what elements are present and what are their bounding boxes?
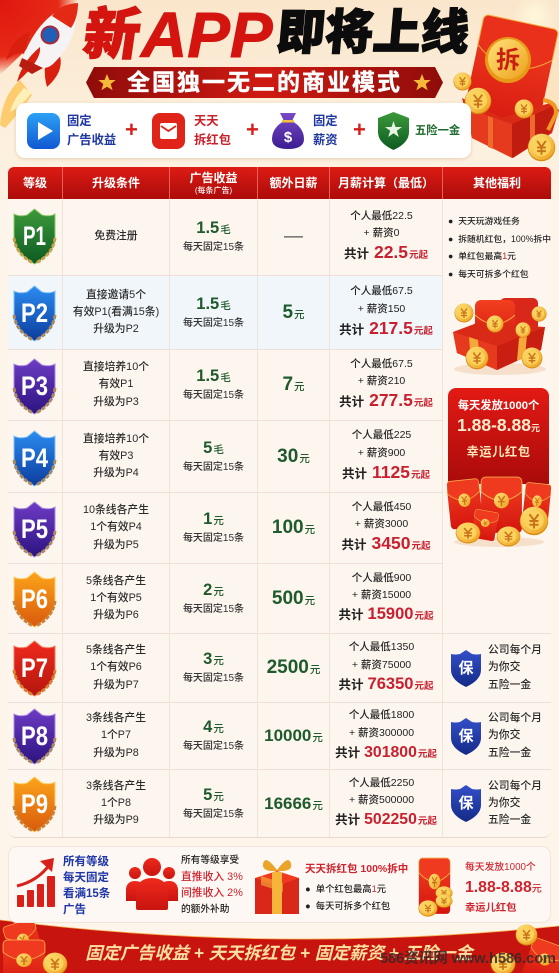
condition: 升级为P6 bbox=[93, 609, 139, 621]
title bbox=[80, 0, 471, 71]
text: fixed ad income bbox=[67, 114, 116, 146]
ad income: 5元 bbox=[203, 786, 224, 804]
footer feature panel bbox=[8, 846, 551, 923]
icon: play bbox=[27, 113, 60, 149]
badge P5 bbox=[12, 502, 56, 558]
text: referral income: 所有等级享受 bbox=[181, 855, 239, 866]
monthly calc: 个人最低1800 bbox=[349, 709, 414, 721]
ad income: 1.5毛 bbox=[196, 367, 231, 385]
condition: 直接邀请5个 bbox=[86, 289, 146, 301]
badge P7: P7 bbox=[21, 653, 48, 683]
daily salary: 7元 bbox=[282, 374, 305, 395]
condition: 有效P1 bbox=[99, 378, 133, 390]
text: fixed ad income: 固定 bbox=[67, 114, 92, 128]
daily salary: 5元 bbox=[282, 302, 305, 322]
text: fixed ad income: 广告收益 bbox=[67, 132, 116, 146]
text: referral income: 直推收入 3% bbox=[181, 871, 243, 883]
monthly calc: 共计 277.5元起 bbox=[339, 390, 433, 410]
condition: 升级为P7 bbox=[93, 679, 139, 691]
condition: 免费注册 bbox=[94, 230, 138, 242]
badge P4: P4 bbox=[21, 443, 48, 473]
ad income: 4元 bbox=[203, 718, 224, 736]
ad income: 每天固定15条 bbox=[183, 604, 244, 614]
lucky red packet banner: 幸运儿红包 bbox=[466, 445, 530, 459]
daily salary bbox=[257, 421, 329, 492]
condition: 10条线各产生 bbox=[83, 504, 149, 516]
daily salary bbox=[257, 564, 329, 633]
daily salary: 10000元 bbox=[264, 726, 323, 745]
daily salary: 16666元 bbox=[264, 794, 323, 812]
monthly calc bbox=[329, 276, 442, 349]
monthly calc: + 薪资0 bbox=[364, 227, 399, 239]
text: daily red packet: 天天 bbox=[194, 114, 219, 128]
icon: people bbox=[126, 858, 178, 910]
condition: 1个P7 bbox=[101, 729, 131, 741]
header cells: 月薪计算（最低） bbox=[338, 176, 434, 190]
badge P4 bbox=[12, 430, 56, 486]
monthly calc: 个人最低1350 bbox=[349, 641, 414, 653]
ad income bbox=[169, 350, 257, 420]
ad income bbox=[169, 199, 257, 275]
benefits list: ● 拆随机红包，100%拆中 bbox=[448, 234, 551, 244]
badge P7 bbox=[12, 640, 56, 696]
ad income: 每天固定15条 bbox=[183, 673, 244, 684]
monthly calc: 共计15900元起 bbox=[339, 605, 433, 623]
monthly calc: + 薪资300000 bbox=[349, 726, 414, 738]
text: referral income: 的额外补助 bbox=[181, 904, 229, 915]
ad income: 3元 bbox=[203, 650, 224, 668]
condition: 1个有效P4 bbox=[90, 521, 142, 533]
ad income: 5毛 bbox=[203, 438, 224, 456]
text: all levels ads bbox=[63, 855, 110, 916]
ad income: 每天固定15条 bbox=[183, 390, 244, 401]
condition: 升级为P5 bbox=[93, 539, 139, 551]
insurance benefit bbox=[442, 703, 551, 769]
insurance benefit bbox=[442, 770, 551, 837]
icon: money bag bbox=[272, 113, 304, 149]
insurance benefit: 为你交 bbox=[488, 729, 520, 741]
monthly calc: 个人最低22.5 bbox=[350, 210, 413, 222]
footer slogan: 固定广告收益 + 天天拆红包 + 固定薪资 + 五险一金 bbox=[85, 943, 473, 963]
condition bbox=[62, 350, 169, 420]
daily salary bbox=[257, 199, 329, 275]
monthly calc: + 薪资150 bbox=[358, 302, 405, 314]
text: referral income: 间推收入 2% bbox=[181, 887, 243, 899]
monthly calc bbox=[329, 634, 442, 702]
row P9 bbox=[8, 770, 551, 838]
insurance benefit bbox=[442, 634, 551, 702]
text: daily packet: ● 每天可拆多个红包 bbox=[305, 901, 390, 911]
monthly calc bbox=[329, 564, 442, 633]
text: all levels ads: 广告 bbox=[63, 904, 86, 916]
subtitle ribbon bbox=[86, 67, 443, 98]
daily salary: 30元 bbox=[277, 446, 310, 466]
text: daily red packet: 拆红包 bbox=[194, 132, 231, 146]
condition bbox=[62, 634, 169, 702]
condition: 有效P3 bbox=[99, 450, 133, 462]
benefits list: ● 天天玩游戏任务 bbox=[448, 216, 520, 226]
text: all levels ads: 看满15条 bbox=[63, 888, 110, 900]
insurance benefit: 五险一金 bbox=[488, 814, 531, 826]
condition: 5条线各产生 bbox=[86, 644, 146, 656]
condition: 直接培养10个 bbox=[83, 433, 149, 445]
lucky red packet banner: 每天发放1000个 bbox=[458, 400, 539, 412]
badge P3: P3 bbox=[21, 371, 48, 401]
badge P6 bbox=[12, 572, 56, 628]
badge P8 bbox=[12, 708, 56, 764]
monthly calc: + 薪资900 bbox=[358, 446, 405, 458]
condition bbox=[62, 564, 169, 633]
text: fixed salary: 薪资 bbox=[313, 132, 338, 146]
condition bbox=[62, 421, 169, 492]
text: lucky packet: 幸运儿红包 bbox=[465, 903, 516, 914]
ad income: 1.5毛 bbox=[196, 219, 231, 237]
icon: red packet app bbox=[152, 113, 185, 149]
benefits list bbox=[448, 216, 551, 279]
hero background bbox=[0, 0, 559, 200]
illustration: red packets and coins bbox=[447, 476, 551, 547]
ad income: 每天固定15条 bbox=[183, 533, 244, 544]
header cells: 其他福利 bbox=[473, 176, 521, 190]
badge P1 bbox=[12, 208, 56, 264]
text: insurance: 五险一金 bbox=[415, 125, 460, 137]
header cells: (每条广告) bbox=[195, 186, 232, 194]
ad income: 1元 bbox=[203, 510, 224, 528]
insurance benefit: 公司每个月 bbox=[488, 780, 542, 792]
text: daily packet bbox=[305, 863, 408, 911]
ad income bbox=[169, 421, 257, 492]
row P2 bbox=[8, 276, 442, 350]
illustration: red packet and gift box: 拆 bbox=[496, 47, 520, 74]
monthly calc: + 薪资3000 bbox=[355, 518, 408, 530]
row P5 bbox=[8, 493, 442, 564]
condition: 升级为P2 bbox=[93, 323, 139, 335]
condition: 直接培养10个 bbox=[83, 361, 149, 373]
condition: 3条线各产生 bbox=[86, 712, 146, 724]
condition bbox=[62, 199, 169, 275]
ad income bbox=[169, 770, 257, 837]
red footer band bbox=[0, 920, 559, 973]
ad income: 每天固定15条 bbox=[183, 741, 244, 752]
monthly calc bbox=[329, 421, 442, 492]
monthly calc: 共计76350元起 bbox=[339, 675, 433, 693]
ad income: 2元 bbox=[203, 580, 224, 598]
row P7 bbox=[8, 634, 551, 703]
monthly calc: 个人最低450 bbox=[352, 501, 411, 513]
monthly calc: + 薪资75000 bbox=[352, 658, 411, 670]
badge P6: P6 bbox=[21, 584, 48, 614]
lucky red packet banner: 1.88-8.88元 bbox=[457, 415, 540, 435]
daily salary bbox=[257, 770, 329, 837]
header cells: 额外日薪 bbox=[269, 176, 318, 190]
watermark: 586资讯网 www.h586.com bbox=[380, 951, 556, 967]
icon: growth chart bbox=[16, 858, 55, 907]
icon: money bag: $ bbox=[284, 129, 293, 146]
monthly calc bbox=[329, 199, 442, 275]
insurance benefit: 为你交 bbox=[488, 661, 520, 673]
merged benefits cell bbox=[442, 199, 551, 634]
monthly calc bbox=[329, 350, 442, 420]
text: all levels ads: 每天固定 bbox=[63, 872, 109, 884]
daily salary: — bbox=[284, 226, 303, 247]
monthly calc: 个人最低2250 bbox=[349, 777, 414, 789]
benefits list: ● 每天可拆多个红包 bbox=[448, 269, 529, 279]
badge P2 bbox=[12, 286, 56, 342]
plus: + bbox=[246, 117, 259, 142]
insurance benefit: 五险一金 bbox=[488, 747, 531, 759]
daily salary bbox=[257, 350, 329, 420]
subtitle ribbon: 全国独一无二的商业模式 bbox=[127, 69, 402, 95]
text: lucky packet bbox=[465, 862, 542, 914]
daily salary bbox=[257, 493, 329, 563]
condition: 升级为P4 bbox=[93, 467, 139, 479]
plus: + bbox=[125, 117, 138, 142]
row P6 bbox=[8, 564, 442, 634]
monthly calc: 个人最低67.5 bbox=[350, 358, 413, 370]
badge P5: P5 bbox=[21, 514, 48, 544]
monthly calc: 个人最低900 bbox=[352, 572, 411, 584]
plus: + bbox=[353, 117, 366, 142]
monthly calc: + 薪资500000 bbox=[349, 794, 414, 806]
condition: 3条线各产生 bbox=[86, 780, 146, 792]
text: daily packet: 天天拆红包 100%拆中 bbox=[305, 863, 408, 875]
daily salary bbox=[257, 276, 329, 349]
monthly calc: 个人最低67.5 bbox=[350, 285, 413, 297]
monthly calc: 共计 3450元起 bbox=[342, 533, 430, 553]
icon: rocket bbox=[0, 3, 78, 128]
condition bbox=[62, 770, 169, 837]
icon: packet with coins bbox=[418, 858, 453, 917]
monthly calc: 共计 502250元起 bbox=[335, 811, 437, 828]
badge P8: P8 bbox=[21, 721, 48, 751]
monthly calc: 共计 217.5元起 bbox=[339, 318, 433, 338]
monthly calc bbox=[329, 703, 442, 769]
benefits list: ● 单红包最高1元 bbox=[448, 251, 516, 261]
ad income: 每天固定15条 bbox=[183, 462, 244, 472]
header cells: 广告收益 bbox=[189, 170, 238, 184]
daily salary: 500元 bbox=[272, 588, 315, 608]
illustration: gift box with packets bbox=[453, 298, 547, 375]
ad income: 每天固定15条 bbox=[183, 808, 244, 820]
condition: 1个有效P5 bbox=[90, 592, 142, 604]
text: daily packet: ● 单个红包最高1元 bbox=[305, 884, 386, 894]
monthly calc: 共计 1125元起 bbox=[342, 462, 430, 482]
text: all levels ads: 所有等级 bbox=[63, 856, 109, 868]
text: daily red packet bbox=[194, 114, 231, 146]
title: APP bbox=[141, 0, 273, 71]
insurance benefit: 五险一金 bbox=[488, 679, 531, 691]
row P3 bbox=[8, 350, 442, 421]
monthly calc: 共计 301800元起 bbox=[335, 744, 437, 761]
text: referral income bbox=[181, 854, 243, 915]
icon: green shield bbox=[378, 112, 409, 150]
badge P2: P2 bbox=[21, 298, 48, 328]
benefits pill bbox=[16, 103, 471, 158]
ad income: 1.5毛 bbox=[196, 294, 231, 312]
text: fixed salary: 固定 bbox=[313, 114, 338, 128]
row P4 bbox=[8, 421, 442, 493]
monthly calc: + 薪资15000 bbox=[352, 589, 411, 601]
badge P1: P1 bbox=[23, 221, 46, 251]
condition bbox=[62, 276, 169, 349]
daily salary bbox=[257, 703, 329, 769]
condition bbox=[62, 703, 169, 769]
condition: 升级为P8 bbox=[93, 747, 139, 759]
ad income bbox=[169, 493, 257, 563]
ad income bbox=[169, 703, 257, 769]
insurance benefit: 保 bbox=[458, 728, 474, 745]
ad income bbox=[169, 634, 257, 702]
row P1 bbox=[8, 199, 442, 276]
insurance benefit: 保 bbox=[458, 795, 474, 812]
daily salary: 100元 bbox=[272, 517, 315, 538]
monthly calc bbox=[329, 770, 442, 837]
header cells bbox=[23, 167, 521, 199]
text: lucky packet: 1.88-8.88元 bbox=[465, 879, 542, 896]
insurance benefit: 公司每个月 bbox=[488, 644, 542, 656]
header cells: 升级条件 bbox=[92, 176, 140, 190]
condition: 1个有效P6 bbox=[90, 661, 142, 673]
condition: 升级为P3 bbox=[93, 396, 139, 408]
ad income bbox=[169, 564, 257, 633]
condition: 1个P8 bbox=[101, 797, 131, 809]
header cells: 等级 bbox=[23, 176, 47, 190]
insurance benefit: 为你交 bbox=[488, 797, 520, 809]
footer slogan bbox=[85, 943, 475, 973]
insurance benefit: 保 bbox=[458, 660, 474, 677]
text: lucky packet: 每天发放1000个 bbox=[465, 862, 536, 873]
ad income: 每天固定15条 bbox=[183, 242, 244, 253]
monthly calc: + 薪资210 bbox=[358, 375, 405, 387]
condition: 5条线各产生 bbox=[86, 575, 146, 587]
daily salary: 2500元 bbox=[267, 657, 320, 678]
badge P3 bbox=[12, 358, 56, 414]
ad income: 每天固定15条 bbox=[183, 318, 244, 328]
title: 即将上线 bbox=[275, 7, 471, 60]
monthly calc: 共计 22.5元起 bbox=[344, 242, 428, 262]
condition: 升级为P9 bbox=[93, 814, 139, 826]
icon: gift bbox=[255, 860, 299, 914]
monthly calc bbox=[329, 493, 442, 563]
condition: 有效P1(看满15条) bbox=[73, 306, 159, 318]
daily salary bbox=[257, 634, 329, 702]
lucky red packet banner bbox=[448, 388, 549, 484]
title: 新 bbox=[80, 3, 144, 66]
illustration: red packet and gift box bbox=[454, 14, 559, 162]
table header bbox=[8, 167, 551, 199]
badge P9: P9 bbox=[21, 789, 48, 819]
ad income bbox=[169, 276, 257, 349]
text: fixed salary bbox=[313, 114, 338, 146]
insurance benefit: 公司每个月 bbox=[488, 712, 542, 724]
row P8 bbox=[8, 703, 551, 770]
condition bbox=[62, 493, 169, 563]
badge P9 bbox=[12, 776, 56, 832]
monthly calc: 个人最低225 bbox=[352, 429, 411, 441]
